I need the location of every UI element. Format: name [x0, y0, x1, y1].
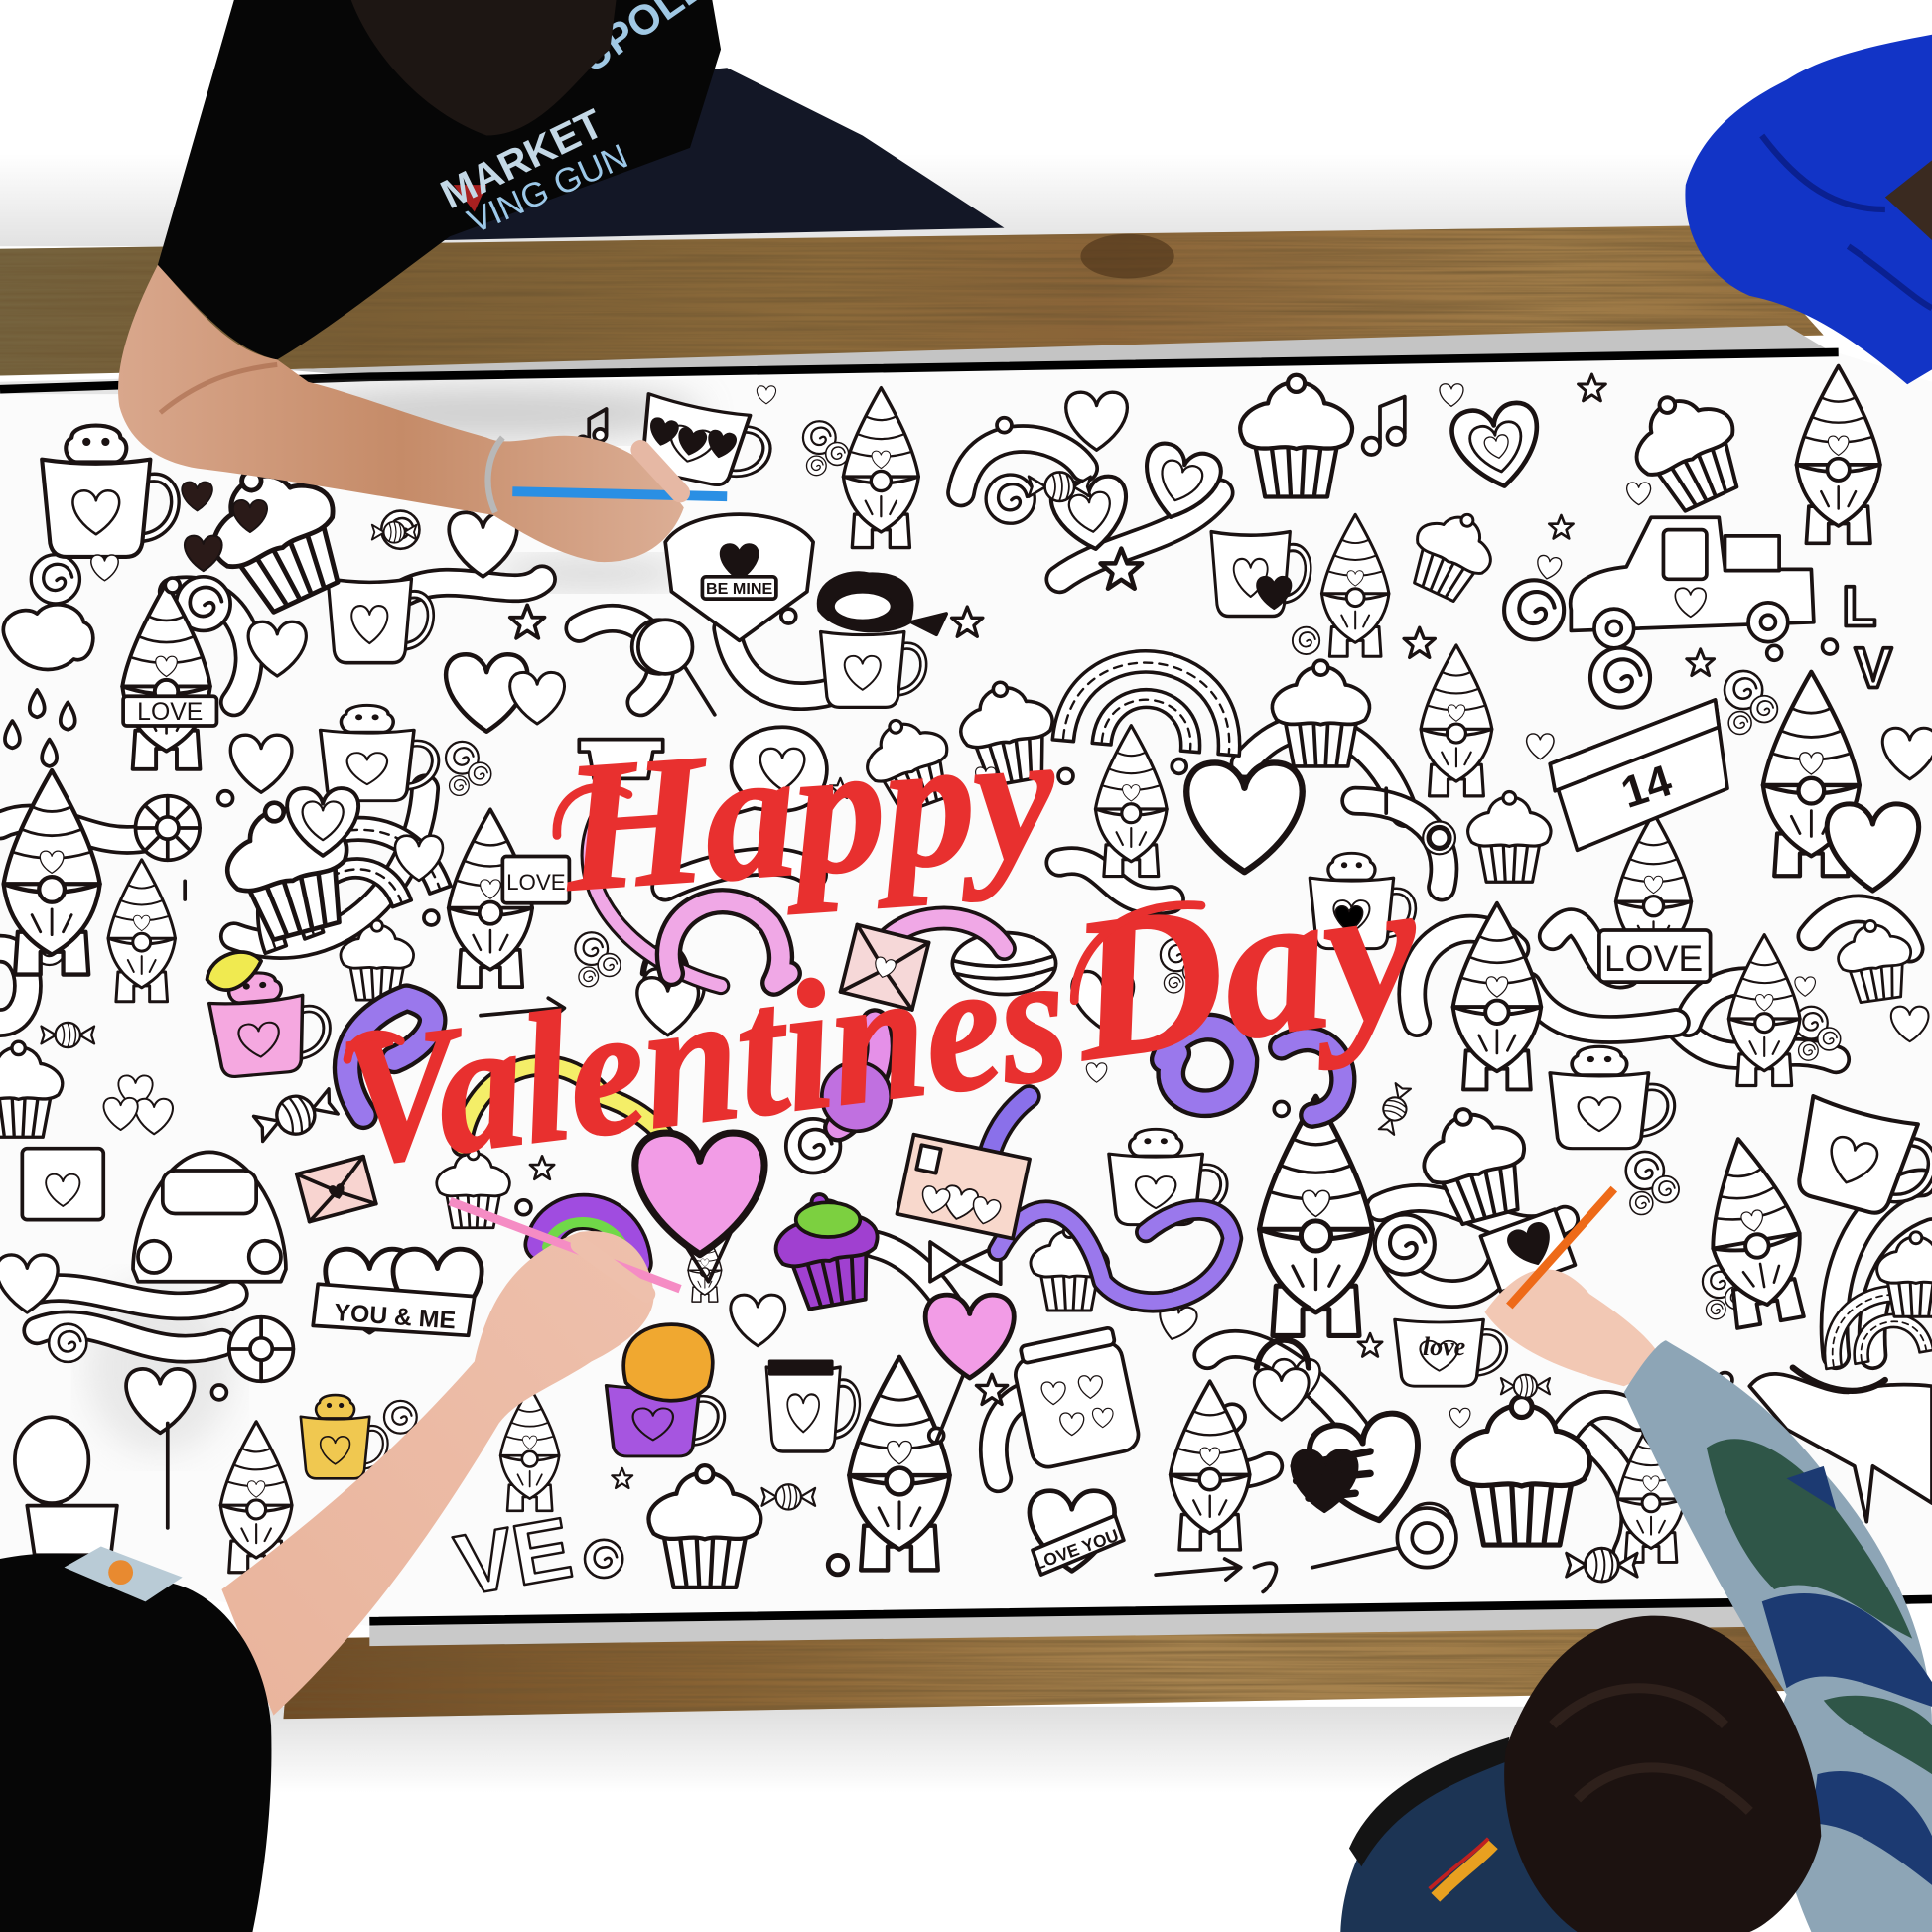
cup: dog: [1550, 1046, 1671, 1149]
person bottom right: head of hair: [1504, 1616, 1821, 1932]
person top left: hair: [351, 0, 617, 136]
cup: bear: [321, 705, 436, 801]
doodles layer: [0, 366, 1932, 1614]
banner YOU & ME: [313, 1284, 475, 1335]
person top right: blue sweatshirt: [1685, 35, 1932, 384]
mug heart: [1211, 532, 1309, 617]
cupcake coloured: [767, 1185, 888, 1313]
yellow unicorn mane: [207, 952, 261, 990]
plant pot: [579, 740, 663, 778]
small swirl clusters: [31, 421, 1841, 1578]
pink loop centre: [668, 901, 788, 983]
black border top: [0, 352, 1839, 389]
cup: hedgehog: [42, 426, 175, 557]
postcard: [897, 1135, 1030, 1239]
large cup right: [1788, 1096, 1932, 1225]
person bottom right: hand: [1484, 1189, 1666, 1386]
gnomes: [4, 366, 1880, 1573]
calendar left: [22, 1149, 103, 1220]
padlock heart lower: [1254, 1340, 1309, 1420]
pink arc right centre: [869, 918, 1004, 973]
lollipops: [168, 620, 1456, 1568]
calendar 14: [1550, 700, 1727, 850]
yellow rainbow: [462, 1065, 678, 1165]
flower: [136, 796, 200, 860]
purple loops right: [1165, 1028, 1244, 1103]
cloud: [3, 605, 93, 669]
title swashes: [347, 787, 1201, 1059]
sign LOVE: [502, 857, 569, 903]
cup: elephant: [1109, 1129, 1224, 1225]
purple loop left: [347, 998, 433, 1115]
raindrops: [5, 690, 75, 766]
gnome LOVE banner: LOVE: [137, 699, 203, 726]
main title: [332, 692, 1434, 1205]
stars: [510, 374, 1715, 1488]
pink marker: [450, 1201, 680, 1289]
pink swirl centre: [838, 1023, 880, 1128]
shirt print: MARKET: [434, 100, 610, 217]
black border bottom: [369, 1599, 1932, 1621]
title: Valentines: Valentines: [332, 913, 1077, 1205]
purple stem: [986, 1097, 1029, 1182]
orange marker: [1509, 1189, 1614, 1307]
shirt print: [434, 0, 713, 241]
cactus pot: [15, 1417, 117, 1555]
rainbow lower right: [1814, 1275, 1932, 1369]
striped heart: [1294, 1451, 1370, 1498]
gnome LOVE banner: [123, 696, 216, 726]
banner YOU & ME: YOU & ME: [334, 1300, 457, 1334]
person top left: arm and hand: [118, 265, 727, 562]
wooden table top edge: [0, 221, 1836, 382]
shirt print: VING GUN: [463, 138, 633, 241]
bow: [930, 1242, 1001, 1284]
letters L V right: V: [1855, 637, 1892, 701]
person top left: black shirt: [158, 0, 721, 359]
calendar 14: 14: [1615, 757, 1678, 818]
small circles: [165, 418, 1837, 1575]
pink balloon heart: [635, 1133, 764, 1282]
cups with animals: [42, 394, 1932, 1478]
sign LOVE: LOVE: [506, 870, 566, 895]
title: Happy: Happy: [556, 692, 1062, 930]
macaron: [952, 932, 1056, 995]
person top left: pants: [444, 68, 1004, 240]
mug: [328, 579, 431, 663]
banner LOVE YOU: LOVE YOU: [1031, 1525, 1121, 1574]
dark hearts by left cupcake: [182, 483, 267, 571]
cup: pink: [207, 967, 331, 1078]
rainbow: [1052, 643, 1248, 756]
coloured ribbons: [347, 819, 1343, 1302]
person bottom left: arm and hand: [221, 1201, 680, 1716]
person bottom left: black shirt: [0, 1547, 271, 1932]
truck: [1571, 517, 1814, 648]
envelope left: [297, 1157, 376, 1222]
table shadow top: [0, 154, 1932, 246]
cupcakes: [0, 375, 1932, 1587]
badge BE MINE: [665, 514, 813, 640]
beetle car: [133, 1152, 286, 1282]
bracelet: [488, 438, 502, 512]
pink arc Happy: [590, 819, 721, 986]
person bottom right: body: [1340, 1725, 1601, 1932]
padlock heart: [637, 946, 698, 1035]
rainbow stripe on hood: [1436, 1845, 1493, 1897]
pink balloon heart lower: [925, 1295, 1014, 1442]
unicorn: [1749, 1368, 1932, 1522]
purple rings lower: [998, 1210, 1232, 1302]
cup: love: love: [1423, 1332, 1465, 1361]
green rainbow: [542, 1211, 634, 1263]
flower bottom: [229, 1317, 293, 1381]
gnome LOVE banner right: LOVE: [1604, 937, 1703, 979]
big letters VE: VE: [449, 1499, 579, 1614]
shirt label: [65, 1547, 183, 1601]
music notes: [185, 397, 1405, 1591]
poster paper: [0, 326, 1932, 1646]
badge BE MINE: BE MINE: [706, 580, 772, 598]
cup: duck: [1310, 853, 1413, 949]
person bottom right: camo sleeve: [1624, 1340, 1932, 1932]
cup: purple tiger: [607, 1324, 722, 1456]
envelope pink centre: [841, 925, 929, 1010]
mug brown: [766, 1361, 857, 1451]
cup: raccoon: [819, 573, 946, 707]
letters L V right: [1842, 575, 1892, 701]
table shadow bottom: [246, 1707, 1601, 1793]
cup: yellow: [301, 1395, 385, 1478]
hearts: [0, 384, 1932, 1571]
arrows: [481, 998, 1241, 1580]
speech bubble heart: [732, 727, 827, 813]
candies: [41, 472, 1637, 1582]
wooden table bottom edge: [284, 1626, 1785, 1720]
envelope dark heart right: [1480, 1209, 1575, 1292]
letters L V right: L: [1842, 575, 1876, 638]
cup: love: [1395, 1319, 1504, 1386]
curvy ribbons: [0, 439, 1932, 1553]
title: Day: Day: [1057, 834, 1434, 1104]
blue marker: [512, 491, 727, 496]
cup: hearts: [633, 394, 773, 494]
big left rainbow arcs: [230, 790, 451, 953]
jar of hearts: [1013, 1327, 1142, 1470]
